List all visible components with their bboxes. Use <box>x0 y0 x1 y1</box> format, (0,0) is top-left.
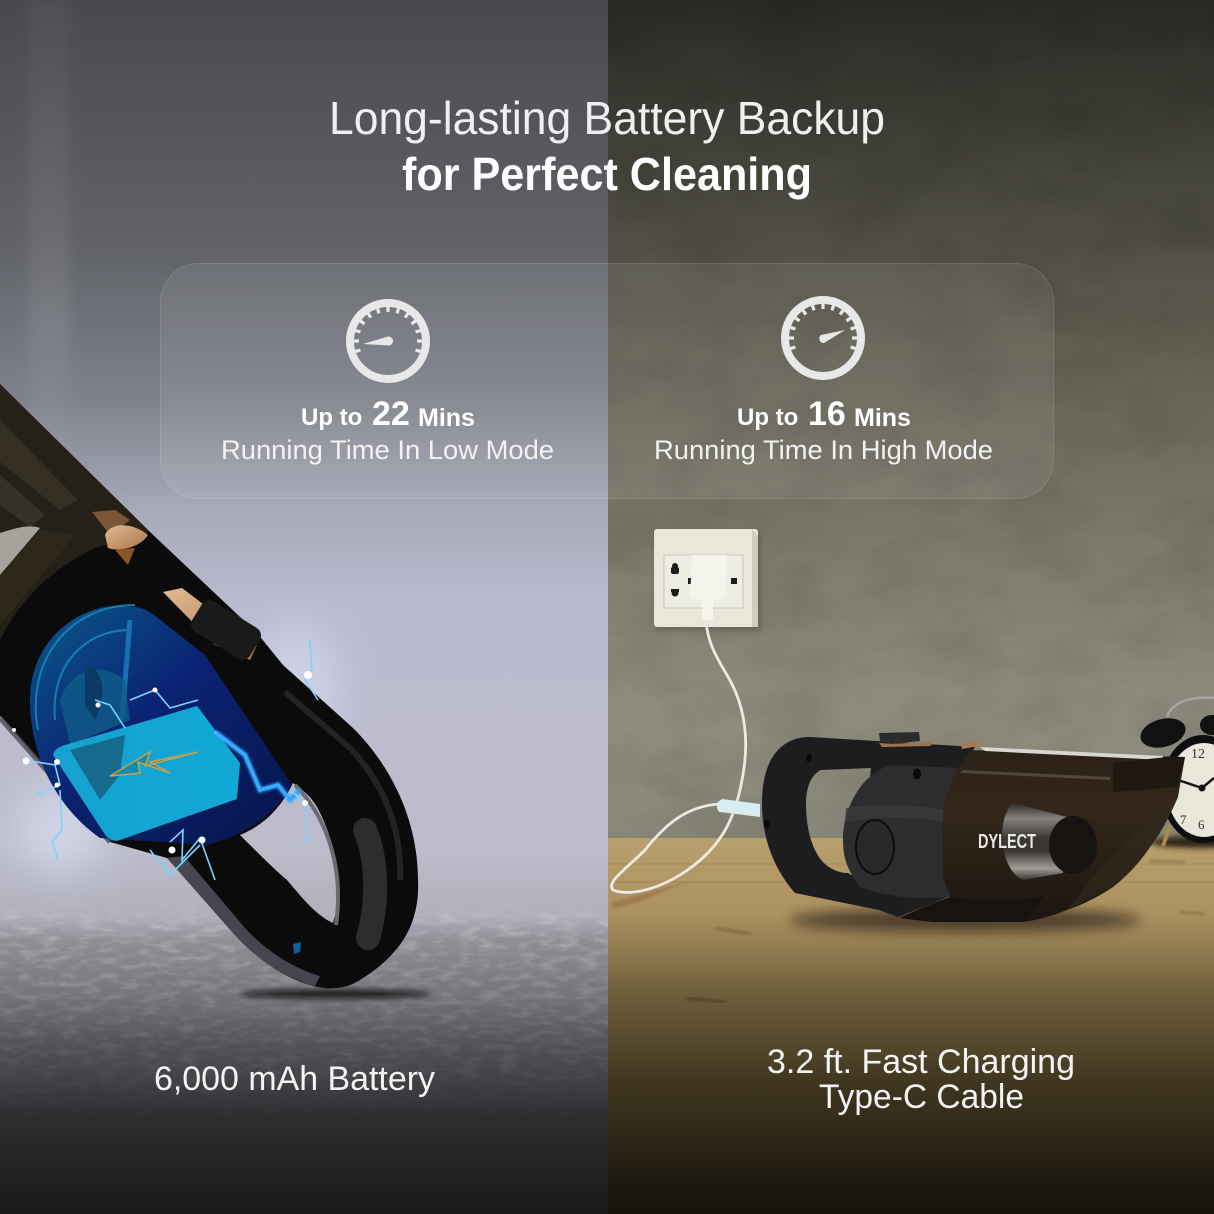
nozzle with ribs <box>1002 803 1097 880</box>
stat: low mode <box>221 395 554 465</box>
transparent dust bin <box>900 747 1185 922</box>
gauge icon: high mode <box>785 300 861 376</box>
internal motor, blue glow <box>30 605 292 845</box>
panel: running time <box>160 264 1054 498</box>
alarm clock: 12 <box>1191 747 1205 762</box>
right scene background: wall and table <box>608 0 1214 1214</box>
title line 2: for Perfect Cleaning <box>402 148 812 200</box>
stat: high mode: Mins <box>854 404 911 432</box>
stat: low mode: Running Time In Low Mode <box>221 435 554 465</box>
stat: high mode: 16 <box>808 395 846 433</box>
brand logo: DYLECT <box>978 831 1036 853</box>
vacuum on table <box>762 732 1185 932</box>
socket and charger <box>612 529 760 892</box>
caption: charging cable <box>767 1043 1075 1116</box>
translucent lower edge <box>167 856 320 986</box>
handle and grip sheen <box>0 692 400 938</box>
alarm clock <box>1137 698 1214 848</box>
power button <box>163 588 264 663</box>
title <box>329 92 885 200</box>
electric sparks <box>12 640 318 880</box>
vacuum body <box>0 384 418 988</box>
title line 1: Long-lasting Battery Backup <box>329 92 885 144</box>
handle <box>762 737 975 917</box>
type-c connector <box>717 799 760 817</box>
caption: battery: 6,000 mAh Battery <box>154 1060 435 1098</box>
main body <box>843 765 958 898</box>
dust bin <box>0 384 150 640</box>
stat: low mode: 22 <box>372 395 410 433</box>
stat: low mode: Mins <box>418 404 475 432</box>
side button <box>856 820 894 874</box>
charger adapter <box>690 555 727 600</box>
caption: charging cable: 3.2 ft. Fast Charging <box>767 1043 1075 1081</box>
wall socket plate <box>654 529 760 630</box>
stat: low mode: Up to <box>301 404 362 431</box>
alarm clock: 6 <box>1198 817 1205 832</box>
table shadow <box>790 908 1140 932</box>
battery <box>53 706 240 841</box>
caption: charging cable: Type-C Cable <box>819 1078 1024 1116</box>
screw holes <box>764 754 921 828</box>
white cable <box>612 600 746 892</box>
alarm clock: 7 <box>1180 812 1187 827</box>
vacuum with transparent battery view <box>0 384 418 988</box>
gauge icon: low mode <box>350 303 426 379</box>
left scene background <box>0 0 608 1214</box>
small blue mark <box>293 942 301 954</box>
copper knob <box>92 510 148 565</box>
stat: high mode <box>654 395 993 465</box>
stat: high mode: Up to <box>737 404 798 431</box>
top button and copper strip <box>879 732 985 749</box>
stat: high mode: Running Time In High Mode <box>654 435 993 465</box>
